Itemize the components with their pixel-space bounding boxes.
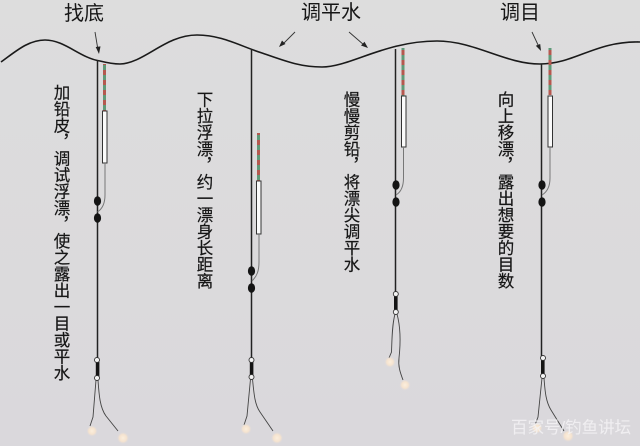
arrow: to 找底 <box>95 32 100 54</box>
arrow: left to 调平水 <box>279 32 295 47</box>
rig 3: trim lead <box>384 48 410 390</box>
text: column 4 instructions: 向上移漂，露出想要的目数 <box>495 91 513 289</box>
text: column 2 instructions: 下拉浮漂，约一漂身长距离 <box>194 91 212 289</box>
arrow: to 调目 <box>532 32 541 51</box>
heading: 调平水: 调平水 <box>301 2 361 24</box>
arrow: right to 调平水 <box>349 32 368 48</box>
text: column 1 instructions: 加铅皮，调试浮漂，使之露出一目或平水 <box>51 84 69 381</box>
heading: 找底: 找底 <box>64 3 104 25</box>
watermark: 百家号/钓鱼讲坛 <box>511 419 631 437</box>
text: column 3 instructions: 慢慢剪铅，将漂尖调平水 <box>341 91 359 272</box>
rig 2: pull float down <box>240 50 283 444</box>
rig 1: find bottom <box>86 60 129 444</box>
rig 4: adjust to target mesh <box>532 48 574 442</box>
water surface line <box>1 35 640 67</box>
heading: 调目: 调目 <box>500 2 540 24</box>
